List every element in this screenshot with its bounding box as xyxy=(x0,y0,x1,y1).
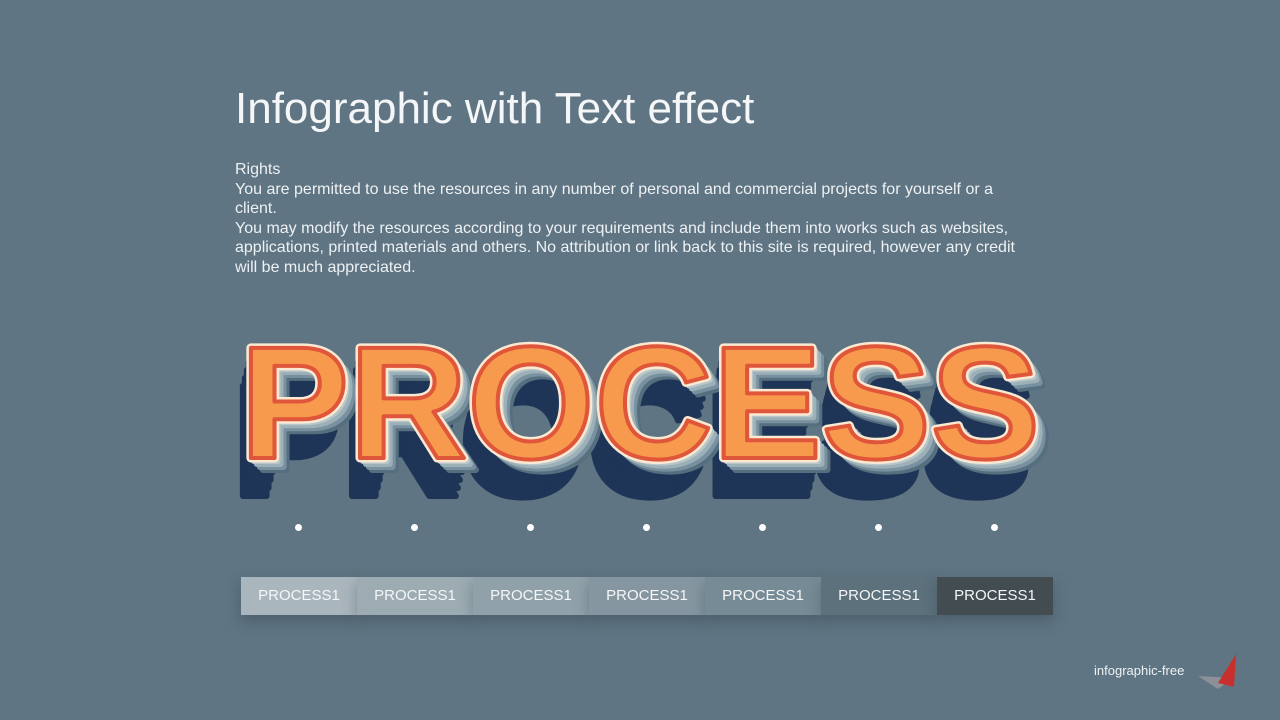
3D text: PROCESS: PROCESS xyxy=(240,313,1040,492)
text: PROCESS1 xyxy=(606,587,688,604)
3D text: PROCESS: PROCESS xyxy=(243,316,1043,495)
logo xyxy=(1094,654,1236,689)
3D text: PROCESS: PROCESS xyxy=(246,319,1046,498)
text block: rights xyxy=(235,161,1015,276)
text: PROCESS1 xyxy=(490,587,572,604)
text: PROCESS1 xyxy=(258,587,340,604)
text block: rights: Rights xyxy=(235,161,280,178)
3D text: PROCESS: PROCESS xyxy=(232,351,1032,530)
text block: rights: You are permitted to use the resources in any number of personal and commercial projects for yourself or a client. xyxy=(235,180,993,217)
dots xyxy=(295,524,998,531)
text: PROCESS1 xyxy=(722,587,804,604)
text: PROCESS1 xyxy=(838,587,920,604)
text block: rights: You may modify the resources according to your requirements and include them into works such as websites, applications, printed materials and others. No attribution or link back to this site is required, however any credit will be much appreciated. xyxy=(235,220,1015,276)
title: Infographic with Text effect xyxy=(235,84,754,133)
3D text: PROCESS: PROCESS xyxy=(238,327,1038,506)
process boxes xyxy=(238,577,1056,626)
text: PROCESS1 xyxy=(954,587,1036,604)
3D text: PROCESS: PROCESS xyxy=(236,335,1036,514)
3D text: PROCESS: PROCESS xyxy=(240,319,1040,498)
logo: infographic-free xyxy=(1094,663,1184,678)
3D text: PROCESS: PROCESS xyxy=(240,313,1040,492)
3D text: PROCESS: PROCESS xyxy=(249,322,1049,501)
3D text: PROCESS: PROCESS xyxy=(252,325,1052,504)
3D text: PROCESS: PROCESS xyxy=(234,343,1034,522)
text: PROCESS1 xyxy=(374,587,456,604)
